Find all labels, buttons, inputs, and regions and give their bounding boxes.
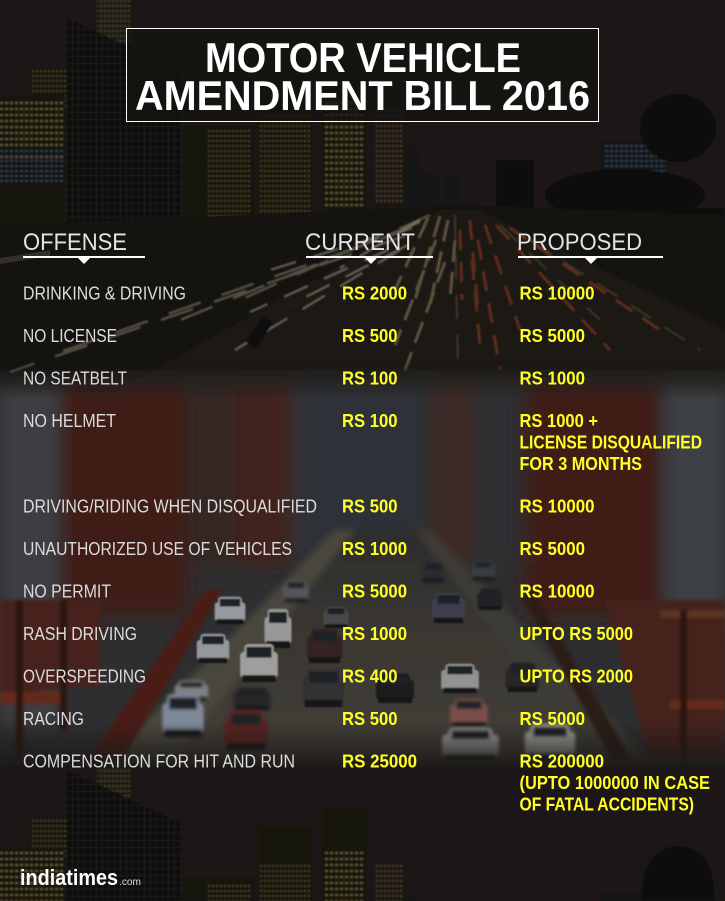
row: no seatbelt: NO SEATBELT: [23, 368, 127, 388]
row: no license: [23, 326, 585, 346]
bridge deck: [60, 530, 660, 800]
row: unauthorized use: RS 1000: [342, 539, 407, 559]
row: racing: [23, 709, 585, 729]
row: no helmet: RS 1000 +: [520, 411, 598, 431]
fade from bridge into city: [0, 722, 725, 770]
row: no permit: [23, 582, 594, 602]
row: no license: NO LICENSE: [23, 326, 117, 346]
row: unauthorized use: UNAUTHORIZED USE OF VEHICLES: [23, 539, 292, 559]
row: no permit: RS 5000: [342, 582, 407, 602]
row: racing: RS 500: [342, 709, 398, 729]
row: overspeeding: UPTO RS 2000: [520, 666, 633, 686]
cars: [197, 589, 539, 707]
row: no permit: RS 10000: [520, 582, 594, 602]
row: compensation for hit and run: (UPTO 1000000 IN CASE: [520, 773, 710, 793]
row: no helmet: RS 100: [342, 411, 398, 431]
row: drinking and driving: [23, 284, 594, 304]
row: driving when disqualified: RS 10000: [520, 496, 594, 516]
row: racing: RS 5000: [520, 709, 585, 729]
logo: indiatimes.com: indiatimes: [20, 865, 118, 890]
row: drinking and driving: RS 2000: [342, 284, 407, 304]
row: no license: RS 5000: [520, 326, 585, 346]
table of offenses and fines: [23, 284, 710, 814]
row: driving when disqualified: [23, 496, 594, 516]
title: AMENDMENT BILL 2016: [135, 72, 590, 119]
logo: indiatimes.com: .com: [119, 877, 141, 888]
row: no seatbelt: [23, 368, 585, 388]
row: drinking and driving: DRINKING & DRIVING: [23, 284, 186, 304]
row: rash driving: [23, 624, 633, 644]
title: MOTOR VEHICLE: [205, 34, 521, 81]
row: rash driving: RASH DRIVING: [23, 624, 137, 644]
row: drinking and driving: RS 10000: [520, 284, 594, 304]
row: unauthorized use: [23, 539, 585, 559]
row: compensation for hit and run: RS 25000: [342, 752, 417, 772]
row: overspeeding: RS 400: [342, 666, 398, 686]
row: driving when disqualified: RS 500: [342, 496, 398, 516]
column header: current: CURRENT: [305, 229, 415, 256]
row: overspeeding: [23, 666, 633, 686]
row: racing: RACING: [23, 709, 84, 729]
background: Golden Gate bridge with traffic: [0, 370, 725, 800]
row: no helmet: NO HELMET: [23, 411, 116, 431]
background: highway with light trails: [0, 205, 725, 400]
row: no seatbelt: RS 1000: [520, 368, 585, 388]
row: overspeeding: OVERSPEEDING: [23, 666, 146, 686]
row: compensation for hit and run: RS 200000: [520, 752, 604, 772]
row: no helmet: FOR 3 MONTHS: [520, 454, 642, 474]
row: compensation for hit and run: OF FATAL ACCIDENTS): [520, 794, 694, 814]
row: no permit: NO PERMIT: [23, 582, 111, 602]
row: rash driving: UPTO RS 5000: [520, 624, 633, 644]
background: repeated night skyline at the bottom: [0, 768, 725, 901]
title: [126, 28, 598, 122]
row: unauthorized use: RS 5000: [520, 539, 585, 559]
background: night city skyline: [0, 0, 725, 240]
row: compensation for hit and run: COMPENSATION FOR HIT AND RUN: [23, 752, 295, 772]
column header: proposed: PROPOSED: [517, 229, 642, 256]
row: no helmet: LICENSE DISQUALIFIED: [520, 432, 702, 452]
row: driving when disqualified: DRIVING/RIDING WHEN DISQUALIFIED: [23, 496, 317, 516]
row: no seatbelt: RS 100: [342, 368, 398, 388]
row: no license: RS 500: [342, 326, 398, 346]
column header: offense: OFFENSE: [23, 229, 127, 256]
row: compensation for hit and run: [23, 752, 710, 814]
row: rash driving: RS 1000: [342, 624, 407, 644]
row: no helmet: [23, 411, 702, 474]
